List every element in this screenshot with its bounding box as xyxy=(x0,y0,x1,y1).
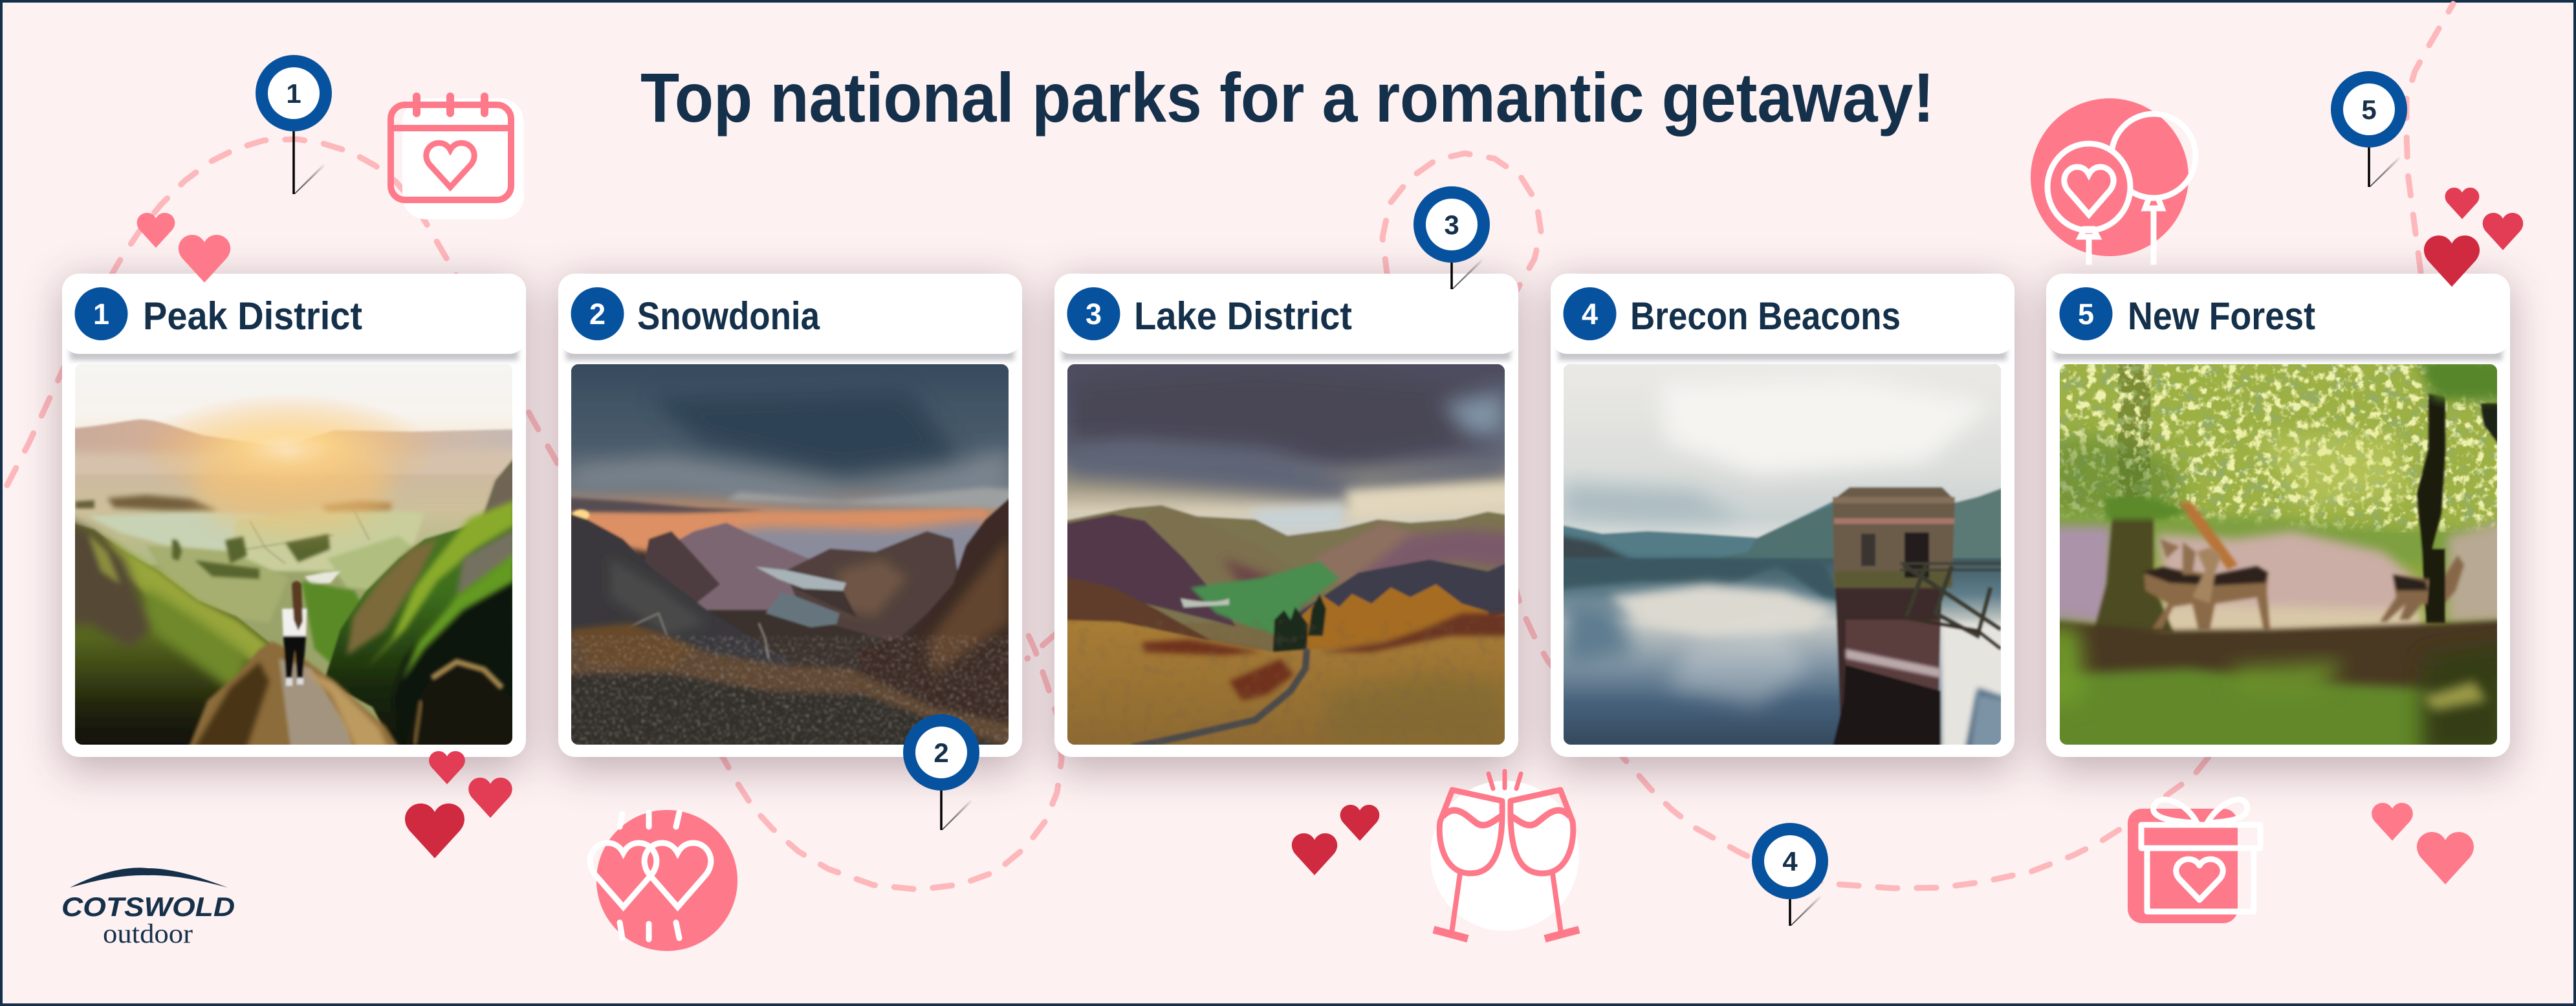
header bar xyxy=(2046,274,2510,354)
map pin 2: 2 xyxy=(933,738,949,768)
hearts: beside toasting glasses xyxy=(1292,805,1379,875)
hearts: bottom right xyxy=(2372,803,2474,884)
hearts: below Peak District xyxy=(405,751,512,858)
park name: New Forest xyxy=(2128,294,2315,338)
header bar xyxy=(558,274,1022,354)
card body xyxy=(558,274,1022,757)
number badge 4: 4 xyxy=(1582,298,1598,331)
photo: Snowdonia mountains and lakes at sunset xyxy=(571,364,1009,745)
map pin 5: 5 xyxy=(2361,94,2377,125)
icon: calendar with heart xyxy=(391,96,524,219)
header bar xyxy=(62,274,526,354)
icon: gift box xyxy=(2128,800,2260,923)
map pin 4: 4 xyxy=(1782,846,1798,877)
number badge 3 xyxy=(1067,287,1120,340)
number badge 1: 1 xyxy=(93,298,109,331)
number badge 3: 3 xyxy=(1086,298,1102,331)
number badge 2: 2 xyxy=(589,298,606,331)
panel: Lake District card xyxy=(1054,274,1518,758)
hearts: near Peak District top xyxy=(137,213,230,283)
map pin 2 xyxy=(903,714,979,830)
park name: Brecon Beacons xyxy=(1630,294,1901,338)
header bar xyxy=(1551,274,2014,354)
panel: Brecon Beacons card xyxy=(1551,274,2014,758)
logo wordmark: COTSWOLD xyxy=(61,891,235,922)
deer group xyxy=(2143,539,2464,629)
number badge 4 xyxy=(1563,287,1616,340)
map pin 3: 3 xyxy=(1444,210,1459,240)
park name: Peak District xyxy=(143,294,362,338)
map pin 4 xyxy=(1752,823,1828,926)
card body xyxy=(2046,274,2510,757)
panel: Snowdonia card xyxy=(558,274,1022,758)
map pin 3 xyxy=(1414,186,1490,289)
icon: toasting glasses xyxy=(1430,771,1579,939)
map pin 5 xyxy=(2331,71,2407,187)
number badge 5: 5 xyxy=(2078,298,2094,331)
header bar xyxy=(1054,274,1518,354)
number badge 1 xyxy=(75,287,128,340)
logo sub-wordmark: outdoor xyxy=(103,919,193,949)
title: Top national parks for a romantic getaway! xyxy=(640,58,1934,137)
card body xyxy=(62,274,526,757)
photo: New Forest deer under trees xyxy=(2040,358,2516,758)
card shadows xyxy=(62,281,2510,770)
logo arc xyxy=(70,868,228,888)
number badge 5 xyxy=(2060,287,2113,340)
park name: Snowdonia xyxy=(637,294,820,338)
map pin 1 xyxy=(256,55,332,194)
panel: Peak District card xyxy=(62,274,526,758)
icon: balloons with heart xyxy=(2031,98,2196,265)
park name: Lake District xyxy=(1134,294,1352,338)
hearts: top right xyxy=(2424,188,2523,287)
card body xyxy=(1054,274,1518,757)
woman figure xyxy=(282,581,307,686)
logo: Cotswold Outdoor xyxy=(61,868,235,949)
photo: Lake District valley in autumn xyxy=(1067,364,1505,745)
photo: Peak District valley at sunrise xyxy=(75,364,512,745)
panel: New Forest card xyxy=(2040,274,2516,758)
icon: linked hearts xyxy=(590,810,737,951)
card body xyxy=(1551,274,2014,757)
map pin 1: 1 xyxy=(286,78,301,109)
number badge 2 xyxy=(571,287,624,340)
photo: Brecon Beacons reservoir and tower xyxy=(1551,351,2014,758)
